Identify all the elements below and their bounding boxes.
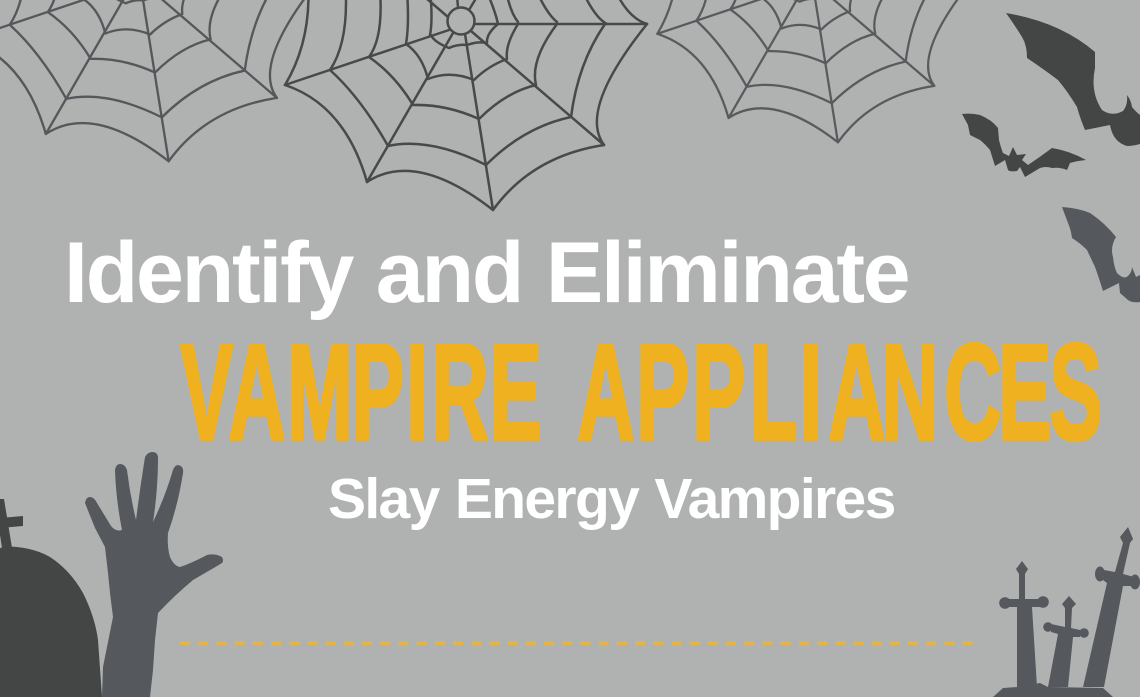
spider web right bbox=[657, 0, 972, 142]
spider web left bbox=[0, 0, 319, 161]
spider web center bbox=[285, 0, 647, 210]
icon: zombie hand bbox=[85, 452, 223, 697]
dashed divider bbox=[180, 641, 975, 645]
headline: vampire appliances: VAMPIRE APPLIANCES bbox=[180, 315, 1102, 468]
title line: Identify and Eliminate bbox=[64, 225, 908, 321]
icon: small bat bbox=[962, 114, 1086, 177]
icon: large bat bbox=[1006, 13, 1140, 146]
subtitle: Slay Energy Vampires bbox=[328, 467, 895, 531]
icon: tombstone with cross bbox=[0, 499, 102, 697]
icon: swords in mound bbox=[993, 527, 1140, 697]
icon: lower bat bbox=[1062, 207, 1140, 302]
